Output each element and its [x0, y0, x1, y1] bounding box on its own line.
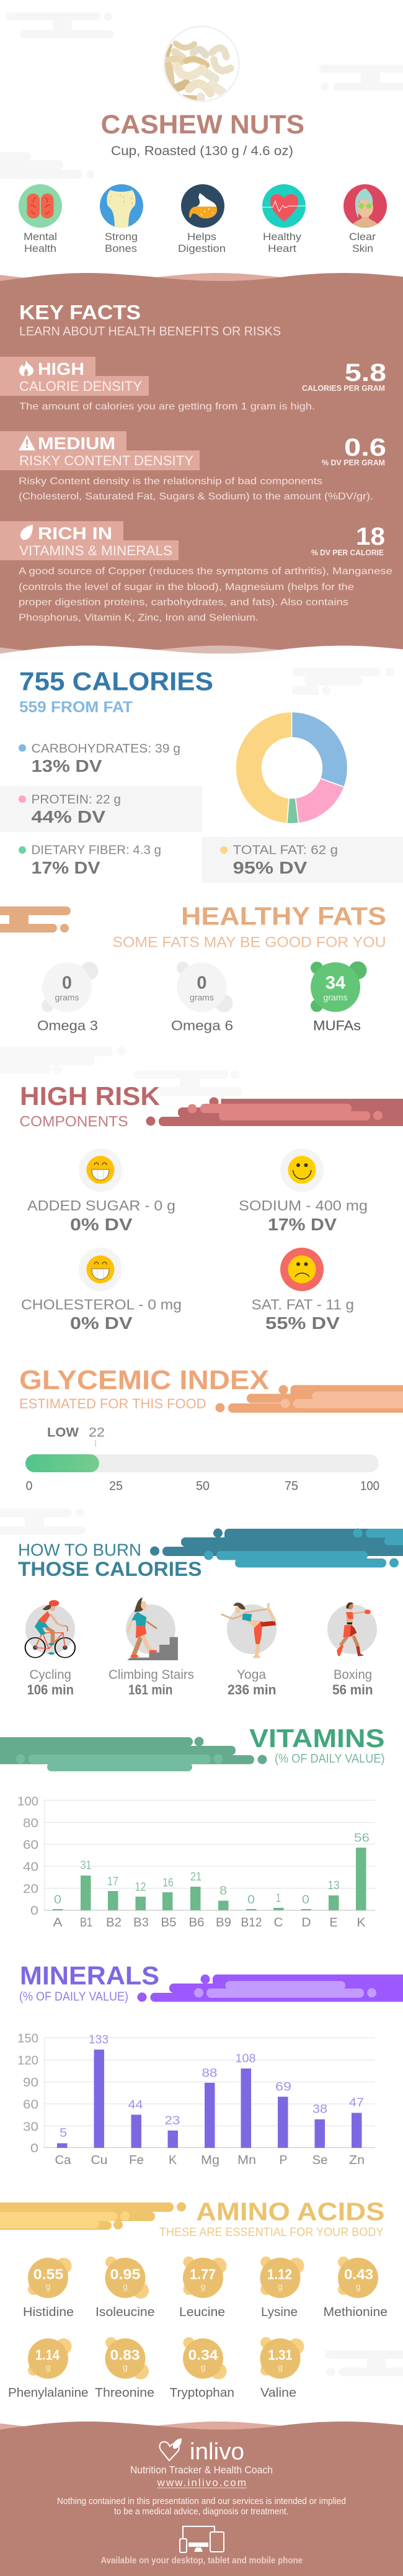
risk: added sugar	[27, 1148, 175, 1234]
gauge: 25	[109, 1479, 123, 1493]
bar chart: vitamins: B5	[161, 1916, 176, 1930]
bar chart: minerals: 133	[89, 2033, 108, 2046]
bar chart: minerals: 47	[349, 2096, 364, 2109]
bar chart: vitamins: 31	[81, 1859, 92, 1872]
subheading: SOME FATS MAY BE GOOD FOR YOU	[113, 934, 386, 950]
badge: omega 3: grams	[55, 993, 79, 1003]
bar chart: minerals: 108	[236, 2052, 255, 2065]
disclaimer: Nothing contained in this presentation and our services is intended or implied	[57, 2497, 346, 2507]
risk: cholesterol	[21, 1248, 182, 1333]
activity: yoga	[221, 1603, 277, 1697]
risk: saturated fat: 55% DV	[265, 1313, 340, 1333]
food photo: cashews	[164, 26, 239, 102]
bar chart: minerals: K	[169, 2153, 177, 2167]
row: carbohydrates: CARBOHYDRATES: 39 g	[31, 742, 180, 756]
activity: climbing stairs	[108, 1598, 194, 1697]
amino: threonine: 0.83	[110, 2346, 140, 2363]
bar chart: vitamins: B6	[188, 1916, 205, 1930]
amino: methionine: Methionine	[324, 2305, 388, 2319]
bar chart: vitamins: 60	[23, 1838, 38, 1852]
amino: valine: g	[278, 2362, 283, 2372]
amino: valine	[260, 2337, 304, 2400]
bar chart: vitamins: A	[53, 1916, 63, 1930]
amino: isoleucine: 0.95	[110, 2266, 141, 2282]
risk: sodium: SODIUM - 400 mg	[239, 1197, 368, 1214]
fact: high calorie density: CALORIE DENSITY	[19, 378, 142, 394]
gauge: 100	[360, 1479, 379, 1493]
bar chart: minerals: Zn	[349, 2153, 365, 2167]
row: total fat	[202, 837, 403, 883]
bar chart: minerals	[17, 2031, 375, 2167]
fact: high calorie density: HIGH	[38, 359, 84, 378]
benefit: helps digestion: Helps	[187, 231, 216, 243]
fact: medium risky content density: Risky Content density is the relationship of bad components	[19, 476, 322, 486]
bar chart: vitamins: 20	[23, 1882, 38, 1896]
amino: lysine: g	[278, 2281, 283, 2291]
row: carbohydrates	[19, 742, 180, 776]
decorative band: yellow	[0, 2203, 186, 2230]
benefit: mental health: Mental	[24, 231, 57, 243]
bar chart: vitamins: 17	[107, 1875, 118, 1889]
bar chart: vitamins: D	[301, 1916, 311, 1930]
activity: boxing	[327, 1603, 377, 1697]
badge: omega 3	[37, 962, 98, 1034]
website link: www.inlivo.com	[156, 2477, 246, 2489]
badge: MUFAs: grams	[324, 993, 347, 1003]
benefit: healthy heart	[262, 184, 306, 254]
row: dietary fiber: DIETARY FIBER: 4.3 g	[31, 844, 161, 857]
gauge: 75	[285, 1479, 298, 1493]
fact: rich in vitamins and minerals	[0, 521, 392, 623]
bar chart: vitamins: 0	[54, 1893, 61, 1907]
activity: climbing stairs: 161 min	[128, 1682, 172, 1697]
amino: isoleucine	[95, 2256, 155, 2319]
amino: histidine: Histidine	[23, 2305, 74, 2319]
gauge: 50	[196, 1479, 210, 1493]
heading: glycemic index: GLYCEMIC INDEX	[19, 1365, 269, 1395]
amino: methionine: 0.43	[344, 2266, 373, 2282]
bar chart: minerals: 150	[17, 2031, 38, 2046]
benefit: strong bones: Bones	[105, 243, 137, 254]
bar chart: vitamins: 56	[354, 1831, 370, 1845]
badge: omega 3: 0	[62, 973, 72, 993]
row: dietary fiber: 17% DV	[31, 858, 100, 877]
bar chart: vitamins: 16	[162, 1876, 174, 1890]
activity: cycling: 106 min	[27, 1682, 74, 1697]
bar chart: vitamins: B9	[216, 1916, 231, 1930]
panel: healthy fats	[0, 902, 386, 1034]
heading: how to burn: HOW TO BURN	[18, 1540, 141, 1560]
bar chart: minerals: Mn	[237, 2153, 256, 2167]
fact: high calorie density: CALORIES PER GRAM	[302, 384, 385, 393]
bar chart: minerals: 90	[23, 2075, 38, 2090]
bar chart: vitamins: 100	[17, 1794, 38, 1809]
benefit: clear skin: Skin	[352, 243, 373, 254]
panel: amino acids	[0, 2198, 403, 2400]
subheading: components: COMPONENTS	[20, 1113, 128, 1130]
amino: lysine: 1.12	[267, 2266, 292, 2282]
bar chart: vitamins: 0	[30, 1903, 38, 1918]
bar chart: vitamins: B3	[133, 1916, 149, 1930]
fact: rich in vitamins and minerals: A good source of Copper (reduces the symptoms of arthritis), Manganese	[19, 566, 392, 577]
fact: medium risky content density: (Cholesterol, Saturated Fat, Sugars & Sodium) to the amount (%DV/gr).	[19, 491, 373, 502]
bar chart: minerals: P	[279, 2153, 288, 2167]
decorative band: orange	[0, 906, 71, 932]
benefit: mental health	[19, 184, 62, 254]
activity: climbing stairs: Climbing Stairs	[108, 1668, 194, 1682]
subheading: LEARN ABOUT HEALTH BENEFITS OR RISKS	[19, 325, 281, 339]
panel: vitamins	[0, 1724, 384, 1930]
badge: MUFAs	[311, 962, 367, 1034]
benefit: healthy heart: Heart	[268, 243, 296, 254]
benefit: clear skin	[343, 184, 387, 254]
risk: cholesterol: CHOLESTEROL - 0 mg	[21, 1297, 182, 1313]
bar chart: vitamins: K	[357, 1916, 366, 1930]
bar chart: vitamins: 0	[247, 1893, 255, 1907]
amino: lysine	[260, 2256, 304, 2319]
bar chart: minerals: Ca	[55, 2153, 71, 2167]
panel: minerals	[17, 1961, 403, 2167]
subheading: from fat: 559 FROM FAT	[19, 699, 133, 716]
bar chart: minerals: 69	[275, 2080, 291, 2093]
amino: methionine: g	[356, 2281, 360, 2291]
fact: rich in vitamins and minerals: proper digestion proteins, carbohydrates, and fats). Also contains	[19, 597, 348, 608]
icon: devices	[180, 2526, 224, 2552]
bar chart: minerals: 23	[165, 2114, 180, 2127]
bar chart: minerals: 120	[17, 2054, 38, 2067]
amino: valine: Valine	[260, 2386, 296, 2400]
activity: cycling	[25, 1600, 75, 1697]
row: protein	[0, 786, 202, 832]
heading: amino acids: AMINO ACIDS	[196, 2198, 384, 2226]
bar chart: minerals: 44	[128, 2098, 143, 2112]
bar chart: vitamins: 13	[327, 1879, 340, 1892]
logo: inlivo	[160, 2438, 244, 2465]
amino: threonine	[95, 2337, 154, 2400]
subheading: ESTIMATED FOR THIS FOOD	[19, 1396, 206, 1411]
amino: leucine: g	[201, 2281, 205, 2291]
fact: high calorie density	[0, 357, 386, 412]
amino: tryptophan: g	[201, 2362, 205, 2372]
bar chart: vitamins: 80	[23, 1816, 38, 1830]
logo: inlivo: inlivo	[190, 2439, 244, 2465]
benefit: clear skin: Clear	[349, 231, 376, 243]
gauge: 22	[89, 1426, 105, 1439]
bar chart: minerals: 38	[312, 2102, 327, 2116]
amino: methionine	[324, 2256, 388, 2319]
fact: rich in vitamins and minerals: RICH IN	[38, 524, 112, 543]
gauge: LOW	[47, 1426, 79, 1439]
bar chart: minerals: 30	[23, 2119, 38, 2134]
benefit: mental health: Health	[24, 243, 56, 254]
fact: medium risky content density: % DV PER GRAM	[322, 458, 385, 467]
amino: phenylalanine	[8, 2338, 88, 2400]
bar chart: vitamins: 0	[302, 1893, 309, 1907]
amino: threonine: g	[123, 2362, 128, 2372]
heading: key facts: KEY FACTS	[19, 302, 141, 324]
fact: rich in vitamins and minerals: Phosphorus, Vitamin K, Zinc, Iron and Selenium.	[19, 613, 259, 623]
amino: phenylalanine: 1.14	[35, 2346, 60, 2363]
fact: medium risky content density: MEDIUM	[38, 434, 115, 453]
bar chart: minerals: 0	[30, 2141, 38, 2155]
bar chart: minerals: Se	[312, 2153, 327, 2167]
heading: minerals: MINERALS	[20, 1961, 159, 1990]
risk: sodium	[239, 1148, 368, 1234]
row: total fat: TOTAL FAT: 62 g	[233, 844, 338, 857]
risk: cholesterol: 0% DV	[70, 1313, 133, 1333]
amino: lysine: Lysine	[261, 2305, 298, 2319]
risk: saturated fat	[252, 1248, 354, 1333]
amino: leucine	[179, 2256, 227, 2319]
gauge	[25, 1426, 379, 1493]
badge: MUFAs: 34	[326, 973, 345, 993]
decorative band: red	[146, 1097, 403, 1126]
activity: boxing: Boxing	[334, 1668, 372, 1682]
amino: threonine: Threonine	[95, 2386, 154, 2400]
fact: high calorie density: 5.8	[345, 359, 386, 387]
subheading: (% OF DAILY VALUE)	[275, 1752, 384, 1766]
bar chart: minerals: Mg	[201, 2153, 219, 2167]
fact: high calorie density: The amount of calories you are getting from 1 gram is high.	[19, 401, 315, 412]
decorative band: purple	[138, 1974, 403, 2001]
row: dietary fiber	[19, 844, 161, 877]
badge: omega 6: 0	[197, 973, 207, 993]
amino: histidine: 0.55	[33, 2266, 63, 2282]
panel: high risk components	[0, 1046, 403, 1333]
bar chart: vitamins: B2	[106, 1916, 122, 1930]
row: protein: 44% DV	[31, 807, 105, 826]
header panel	[0, 12, 403, 254]
benefit: strong bones	[100, 184, 143, 254]
donut chart	[236, 712, 348, 824]
benefit: healthy heart: Healthy	[263, 231, 302, 243]
decorative band: teal	[150, 1529, 403, 1567]
panel: how to burn calories	[0, 1509, 403, 1697]
amino: phenylalanine: g	[46, 2362, 50, 2372]
risk: sodium: 17% DV	[268, 1215, 337, 1234]
bar chart: vitamins: 1	[276, 1891, 281, 1905]
amino: phenylalanine: Phenylalanine	[8, 2386, 88, 2400]
bar chart: minerals: 5	[60, 2126, 67, 2140]
row: total fat: 95% DV	[233, 858, 308, 877]
amino: histidine: g	[46, 2281, 50, 2291]
amino: isoleucine: Isoleucine	[95, 2305, 155, 2319]
amino: tryptophan: 0.34	[188, 2346, 218, 2363]
fact: medium risky content density: 0.6	[344, 434, 386, 462]
heading: 755 calories: 755 CALORIES	[19, 666, 213, 696]
risk: added sugar: ADDED SUGAR - 0 g	[27, 1197, 175, 1214]
amino: leucine: Leucine	[179, 2305, 225, 2319]
bar chart: vitamins: B1	[80, 1916, 92, 1930]
fact: rich in vitamins and minerals: VITAMINS & MINERALS	[19, 543, 172, 558]
amino: tryptophan	[170, 2337, 234, 2400]
bar chart: vitamins: 40	[23, 1860, 38, 1874]
heading: those calories: THOSE CALORIES	[18, 1558, 202, 1580]
disclaimer: to be a medical advice, diagnosis or treatment.	[114, 2507, 289, 2516]
badge: omega 6: Omega 6	[171, 1017, 233, 1034]
amino: valine: 1.31	[268, 2346, 293, 2363]
bar chart: minerals: Fe	[129, 2153, 144, 2167]
bar chart: minerals: 88	[202, 2066, 217, 2080]
decorative band: peach	[216, 1385, 403, 1413]
panel: key facts	[0, 273, 403, 658]
gauge: 0	[26, 1479, 32, 1493]
bar chart: vitamins: C	[274, 1916, 283, 1930]
panel: glycemic index	[19, 1365, 403, 1493]
fact: medium risky content density	[0, 431, 386, 502]
activity: yoga: Yoga	[237, 1668, 266, 1682]
row: carbohydrates: 13% DV	[31, 756, 102, 776]
serving size subtitle: Cup, Roasted (130 g / 4.6 oz)	[111, 143, 293, 158]
badge: omega 6: grams	[190, 993, 214, 1003]
activity: yoga: 236 min	[228, 1682, 277, 1697]
amino: tryptophan: Tryptophan	[170, 2386, 234, 2400]
bar chart: vitamins: B12	[241, 1916, 262, 1930]
fact: rich in vitamins and minerals: % DV PER CALORIE	[311, 548, 384, 557]
bar chart: vitamins: 8	[219, 1884, 227, 1897]
decorative band: green	[0, 1737, 267, 1771]
badge: omega 6	[171, 962, 233, 1034]
footer panel	[0, 2422, 403, 2576]
benefit: helps digestion: Digestion	[178, 243, 226, 254]
bar chart: vitamins	[17, 1794, 375, 1930]
risk: saturated fat: SAT. FAT - 11 g	[252, 1297, 354, 1313]
risk: added sugar: 0% DV	[70, 1215, 133, 1234]
activity: cycling: Cycling	[30, 1668, 71, 1682]
amino: leucine: 1.77	[190, 2266, 216, 2282]
bar chart: vitamins: E	[330, 1916, 337, 1930]
badge: MUFAs: MUFAs	[313, 1017, 361, 1034]
availability note: Available on your desktop, tablet and mobile phone	[100, 2555, 303, 2566]
benefit: helps digestion	[178, 184, 226, 254]
benefit: strong bones: Strong	[105, 231, 138, 243]
panel: calories	[0, 666, 403, 883]
amino: histidine	[23, 2258, 74, 2319]
badge: omega 3: Omega 3	[37, 1017, 98, 1034]
bar chart: vitamins: 12	[135, 1880, 146, 1894]
subheading: THESE ARE ESSENTIAL FOR YOUR BODY	[159, 2226, 384, 2239]
activity: boxing: 56 min	[332, 1682, 373, 1697]
bar chart: vitamins: 21	[190, 1870, 202, 1884]
row: protein: PROTEIN: 22 g	[31, 793, 121, 807]
bar chart: minerals: Cu	[91, 2153, 108, 2167]
fact: rich in vitamins and minerals: 18	[356, 523, 385, 550]
title: CASHEW NUTS	[100, 110, 304, 140]
amino: isoleucine: g	[123, 2281, 128, 2291]
bar chart: minerals: 60	[23, 2097, 38, 2112]
heading: high risk: HIGH RISK	[20, 1081, 160, 1111]
disclaimer	[57, 2497, 346, 2516]
fact: medium risky content density: RISKY CONTENT DENSITY	[19, 453, 193, 468]
subheading: (% OF DAILY VALUE)	[19, 1990, 128, 2004]
fact: rich in vitamins and minerals: (controls the level of sugar in the blood), Magnesium (helps for the	[19, 582, 354, 593]
tagline: Nutrition Tracker & Health Coach	[130, 2464, 273, 2475]
heading: healthy fats: HEALTHY FATS	[181, 902, 386, 931]
heading: vitamins: VITAMINS	[249, 1724, 384, 1753]
